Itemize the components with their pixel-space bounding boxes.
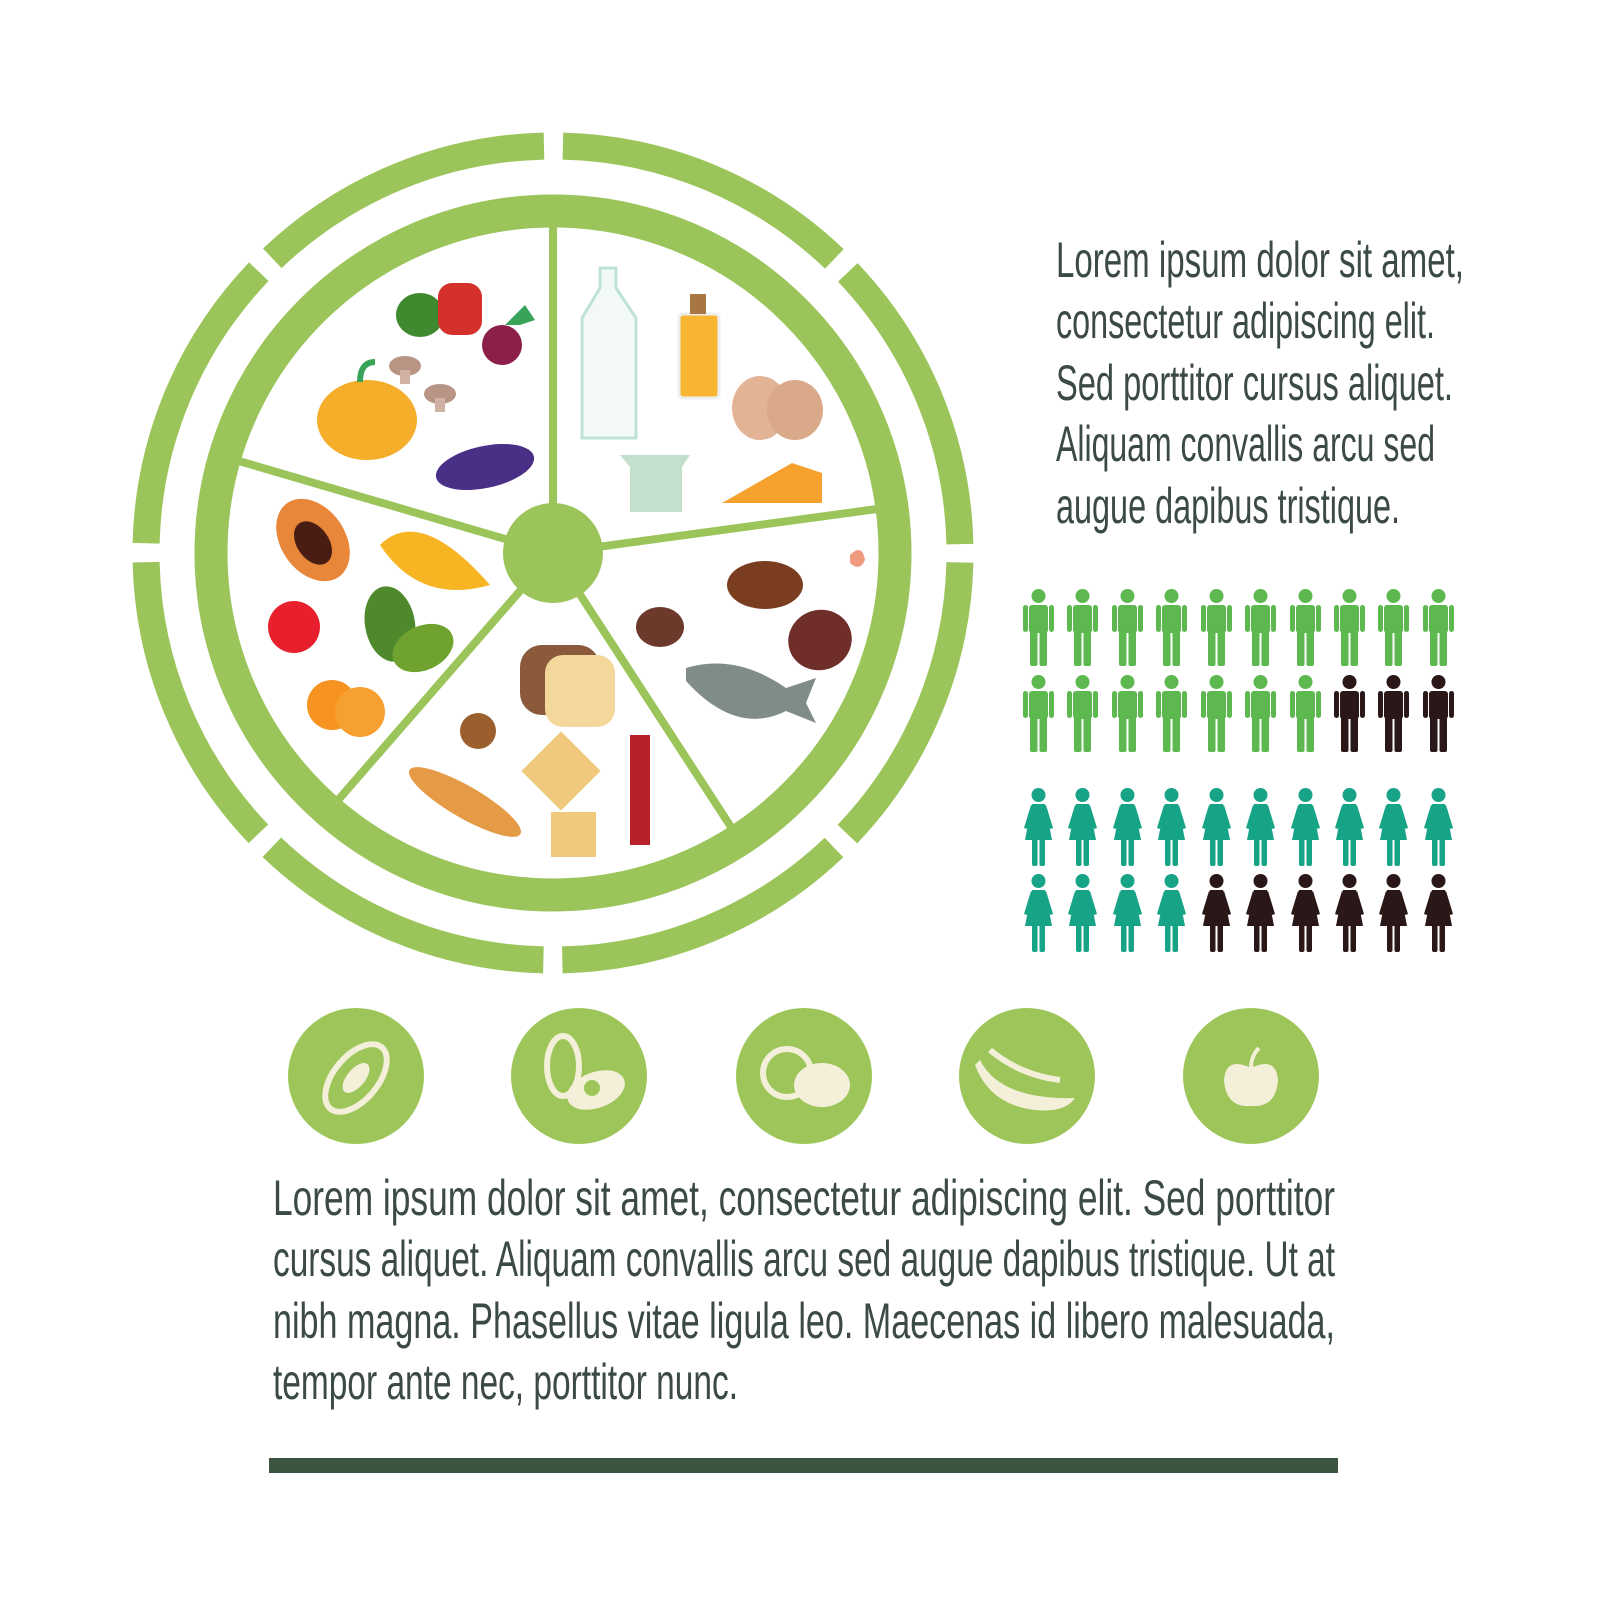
center hub: [503, 503, 603, 603]
dairy: [582, 268, 823, 512]
icon: apple: [1183, 1008, 1319, 1144]
pictogram: men: [1023, 589, 1454, 752]
vegetables: [317, 283, 538, 498]
grains: [402, 645, 650, 857]
proteins: [636, 550, 865, 723]
bottom paragraph: [273, 1170, 1335, 1410]
icon: orange: [736, 1008, 872, 1144]
outer segmented ring: [146, 146, 960, 960]
inner ring: [211, 211, 895, 895]
right text block: augue dapibus tristique.: [1056, 478, 1400, 534]
bottom paragraph: tempor ante nec, porttitor nunc.: [273, 1354, 738, 1410]
icon: banana: [959, 1008, 1095, 1144]
dividers: [239, 226, 877, 827]
icon: avocado: [511, 1008, 647, 1144]
pictogram: women: [1024, 788, 1453, 952]
icon: papaya: [288, 1008, 424, 1144]
icon row: [288, 1008, 1319, 1144]
fruits: [261, 485, 490, 737]
food wheel: [146, 146, 960, 960]
right text block: [1056, 232, 1464, 534]
bottom bar: [269, 1458, 1338, 1473]
